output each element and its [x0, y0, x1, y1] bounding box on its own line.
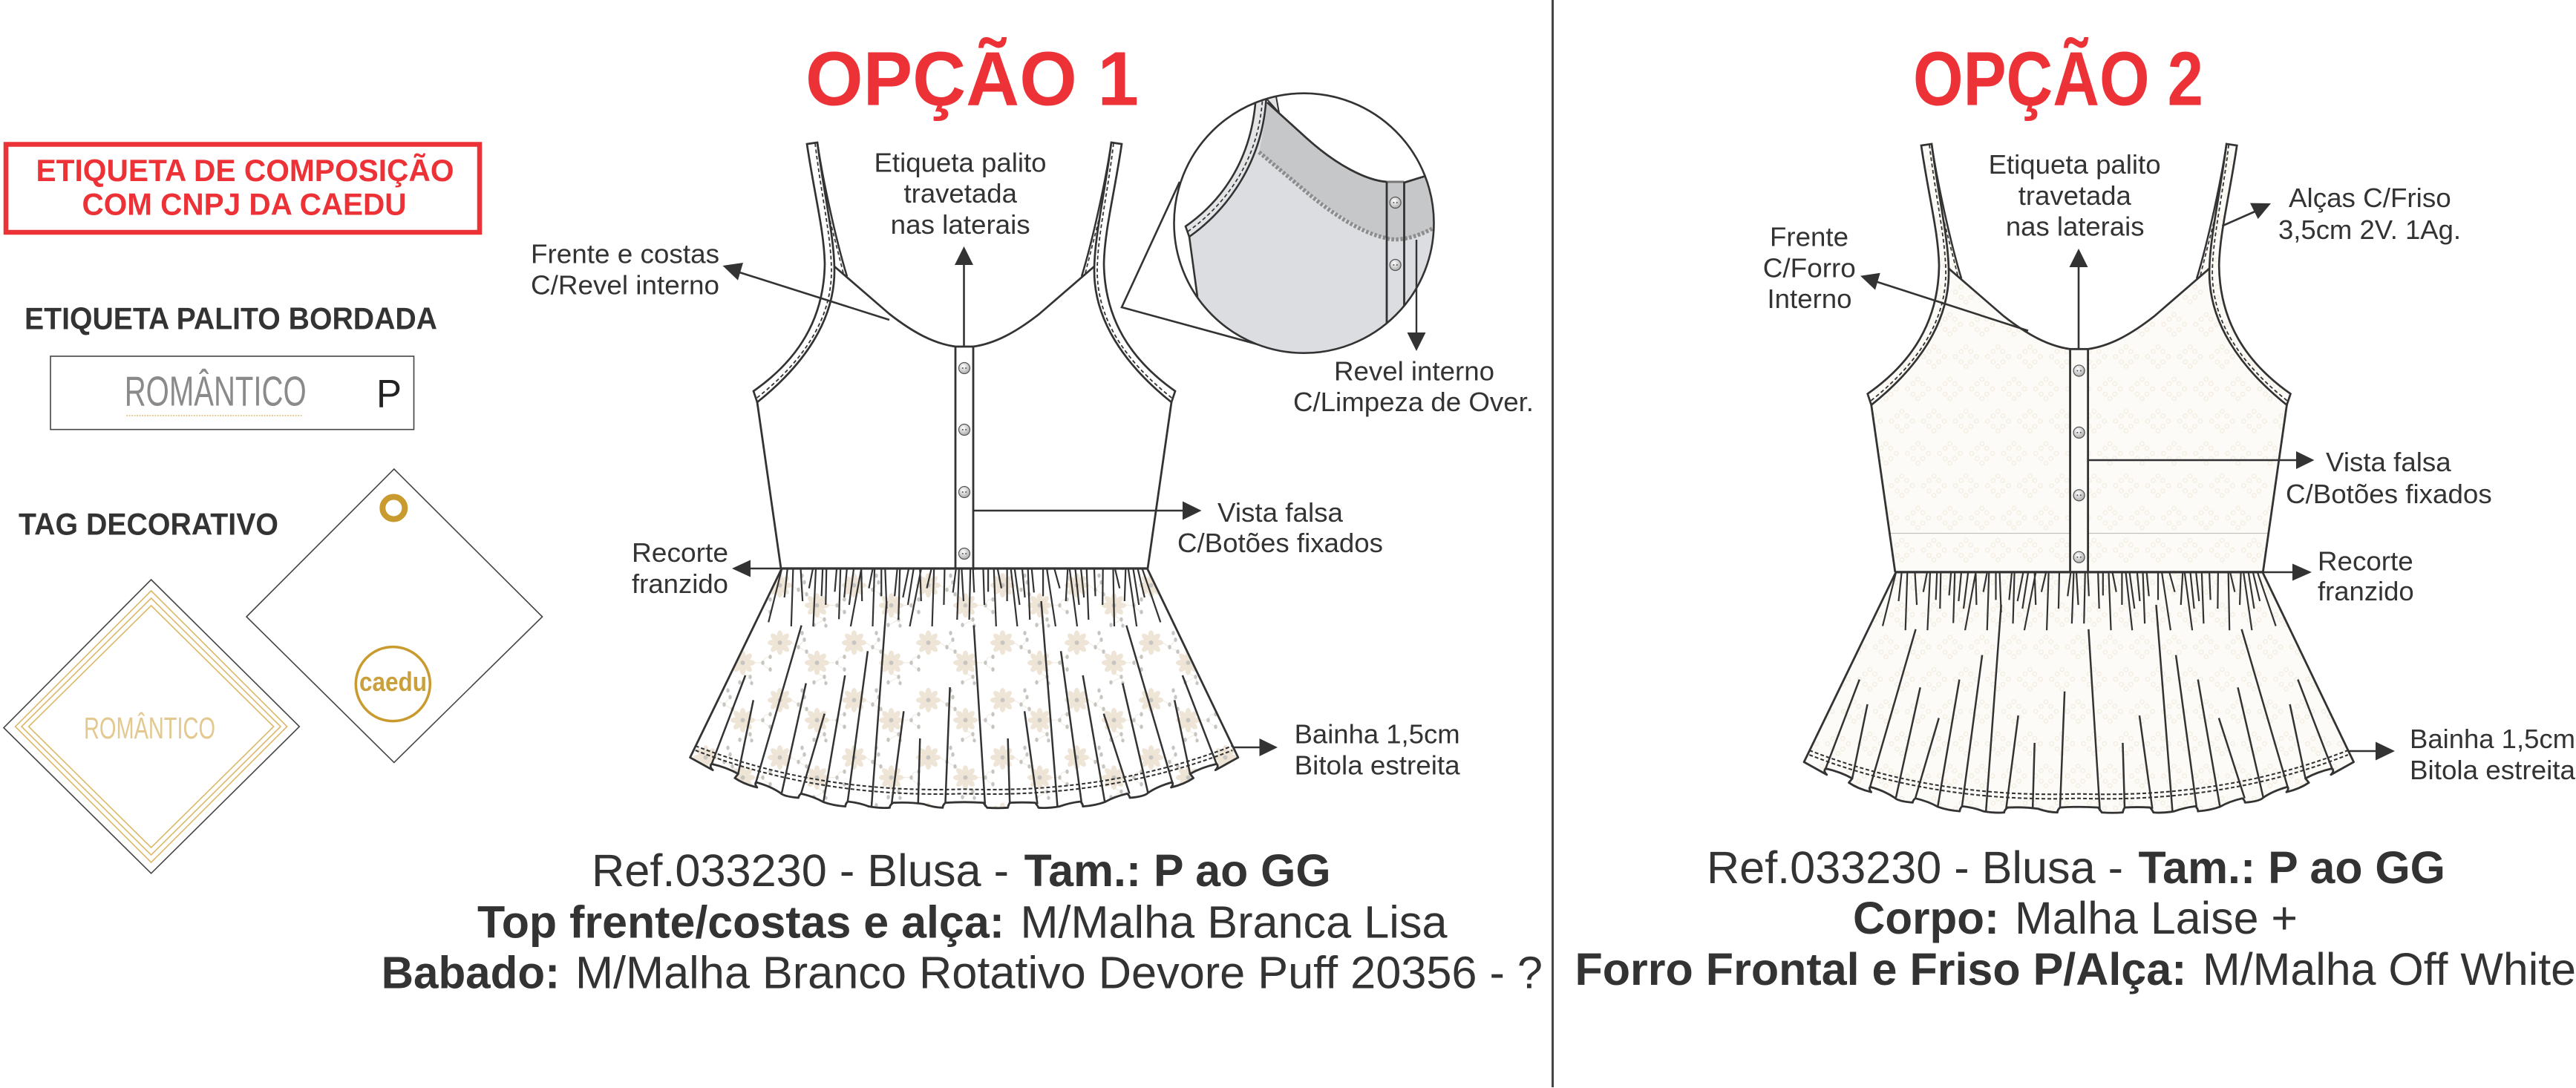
- title: option 1: OPÇÃO 1: [805, 36, 1139, 122]
- annotation: hem: [2410, 724, 2576, 785]
- annotation: gathered seam: franzido: [632, 568, 728, 599]
- panel: left labels and tags: [4, 144, 542, 874]
- annotation: front lining: [1763, 222, 1856, 314]
- heading: decorative tag: TAG DECORATIVO: [19, 507, 278, 542]
- text block: option 1 specifications: M/Malha Branco Rotativo Devore Puff 20356 - ?: [575, 948, 1543, 998]
- bodice: laise fabric: [1868, 144, 2290, 572]
- callout: composition label: COM CNPJ DA CAEDU: [82, 186, 407, 221]
- annotation: label tape: Etiqueta palito: [1989, 149, 2161, 180]
- annotation: label tape: [1989, 149, 2161, 242]
- annotation: front lining: Frente: [1770, 222, 1848, 252]
- arrow: hem: [2348, 742, 2395, 760]
- panel: option 1: [382, 36, 1543, 998]
- arrow: label tape: [955, 246, 973, 347]
- annotation: gathered seam: Recorte: [632, 537, 728, 568]
- embroidered label sample: [50, 356, 414, 430]
- annotation: straps: 3,5cm 2V. 1Ag.: [2278, 214, 2461, 245]
- annotation: front and back facing: [531, 238, 719, 301]
- garment: option 1 blouse: [690, 142, 1238, 808]
- decorative tag: front with Romantico logo: [4, 580, 299, 874]
- embroidered label sample: ROMÂNTICO: [125, 368, 307, 416]
- text block: option 2 specifications: M/Malha Off White: [2203, 944, 2576, 994]
- panel: option 2: [1575, 36, 2576, 994]
- annotation: front and back facing: C/Revel interno: [531, 270, 719, 301]
- annotation: hem: Bitola estreita: [1295, 750, 1461, 780]
- title: option 2: OPÇÃO 2: [1913, 36, 2203, 122]
- decorative tag: back with caedu logo: caedu: [359, 666, 427, 697]
- arrow: front lining: [1860, 273, 2028, 331]
- annotation: hem: Bainha 1,5cm: [1295, 719, 1460, 750]
- annotation: gathered seam: [2318, 546, 2414, 606]
- arrow: false placket: [973, 502, 1201, 520]
- annotation: front lining: Interno: [1767, 284, 1851, 314]
- text block: option 2 specifications: Ref.033230 - Blusa -: [1707, 842, 2123, 893]
- annotation: label tape: travetada: [904, 178, 1018, 209]
- annotation: false placket: Vista falsa: [2326, 447, 2452, 477]
- annotation: false placket: [1177, 497, 1383, 558]
- annotation: label tape: Etiqueta palito: [875, 148, 1047, 178]
- annotation: internal facing: [1293, 356, 1534, 417]
- annotation: label tape: nas laterais: [2006, 211, 2144, 242]
- text block: option 1 specifications: [382, 845, 1543, 998]
- garment: option 2 blouse: [1804, 144, 2354, 813]
- annotation: gathered seam: franzido: [2318, 576, 2414, 606]
- annotation: false placket: C/Botões fixados: [1177, 528, 1383, 558]
- bodice: plain knit: [753, 142, 1175, 568]
- annotation: straps: Alças C/Friso: [2289, 183, 2451, 213]
- detail inset: internal facing magnifier: [1122, 91, 1448, 371]
- annotation: label tape: travetada: [2018, 180, 2132, 211]
- annotation: false placket: C/Botões fixados: [2286, 479, 2492, 509]
- text block: option 1 specifications: Ref.033230 - Blusa -: [592, 845, 1009, 896]
- text block: option 2 specifications: [1575, 842, 2576, 994]
- annotation: straps: [2278, 183, 2461, 245]
- text block: option 2 specifications: Malha Laise +: [2015, 893, 2298, 943]
- skirt: floral ruffle: [690, 568, 1238, 808]
- annotation: hem: [1295, 719, 1461, 780]
- arrow: false placket: [2088, 451, 2315, 469]
- arrow: gathered seam: [2263, 564, 2312, 580]
- arrow: gathered seam: [732, 560, 781, 577]
- annotation: front lining: C/Forro: [1763, 252, 1856, 283]
- annotation: internal facing: Revel interno: [1334, 356, 1494, 387]
- arrow: facing: [723, 263, 889, 320]
- text block: option 2 specifications: Tam.: P ao GG: [2138, 842, 2445, 893]
- annotation: label tape: [875, 148, 1047, 240]
- annotation: internal facing: C/Limpeza de Over.: [1293, 387, 1534, 417]
- callout: composition label: [6, 144, 480, 232]
- annotation: false placket: [2286, 447, 2492, 509]
- text block: option 1 specifications: Top frente/costas e alça:: [477, 897, 1004, 947]
- decorative tag: back with caedu logo: [246, 469, 542, 762]
- text block: option 1 specifications: Babado:: [382, 948, 560, 998]
- text block: option 2 specifications: Corpo:: [1853, 893, 1999, 943]
- annotation: label tape: nas laterais: [891, 209, 1030, 240]
- text block: option 1 specifications: M/Malha Branca Lisa: [1020, 897, 1448, 947]
- decorative tag: front with Romantico logo: ROMÂNTICO: [84, 711, 215, 745]
- annotation: front and back facing: Frente e costas: [531, 238, 719, 269]
- arrow: hem: [1233, 738, 1278, 756]
- text block: option 1 specifications: Tam.: P ao GG: [1024, 845, 1331, 896]
- annotation: false placket: Vista falsa: [1217, 497, 1344, 528]
- annotation: hem: Bitola estreita: [2410, 755, 2576, 785]
- skirt: laise fabric: [1804, 572, 2354, 813]
- heading: embroidered label: ETIQUETA PALITO BORDADA: [24, 301, 437, 335]
- arrow: label tape: [2070, 249, 2088, 349]
- annotation: gathered seam: [632, 537, 728, 599]
- text block: option 2 specifications: Forro Frontal e Friso P/Alça:: [1575, 944, 2187, 994]
- embroidered label sample: P: [376, 373, 402, 416]
- callout: composition label: ETIQUETA DE COMPOSIÇÃO: [36, 153, 454, 188]
- annotation: gathered seam: Recorte: [2318, 546, 2413, 577]
- divider between options: [1552, 0, 1554, 1087]
- annotation: hem: Bainha 1,5cm: [2410, 724, 2575, 754]
- arrow: straps: [2222, 203, 2271, 226]
